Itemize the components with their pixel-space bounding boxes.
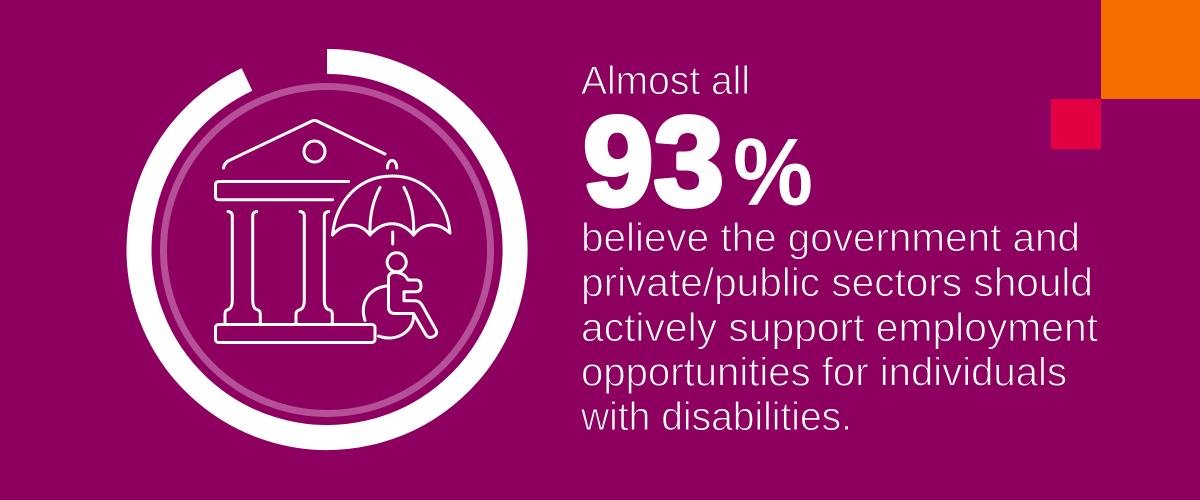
icon: umbrella [332,160,450,244]
icon: building base [216,324,375,342]
text block: description: believe the government and [581,216,1080,260]
icon: roof circle [304,141,325,162]
stat digits: 93 [583,91,724,232]
icon: government building with umbrella and wheelchair user [216,120,450,342]
icon: left column [225,212,260,323]
big stat: 93% [583,91,813,232]
icon: right column [296,212,332,323]
inner thin ring [164,86,490,414]
icon: building entablature [216,182,348,200]
text block: description [580,216,1098,439]
icon: wheelchair user [363,253,437,338]
text block: description: actively support employment [581,306,1098,350]
red accent square [1051,99,1101,149]
progress ring: 93% [139,61,515,437]
stat percent sign: % [733,119,813,226]
orange corner square [1101,0,1200,99]
text block: Almost all: Almost all [581,59,750,103]
text block: description: private/public sectors should [581,261,1093,305]
text block: description: opportunities for individuals [581,350,1067,394]
text block: description: with disabilities. [580,395,852,439]
icon: building roof [224,120,385,168]
